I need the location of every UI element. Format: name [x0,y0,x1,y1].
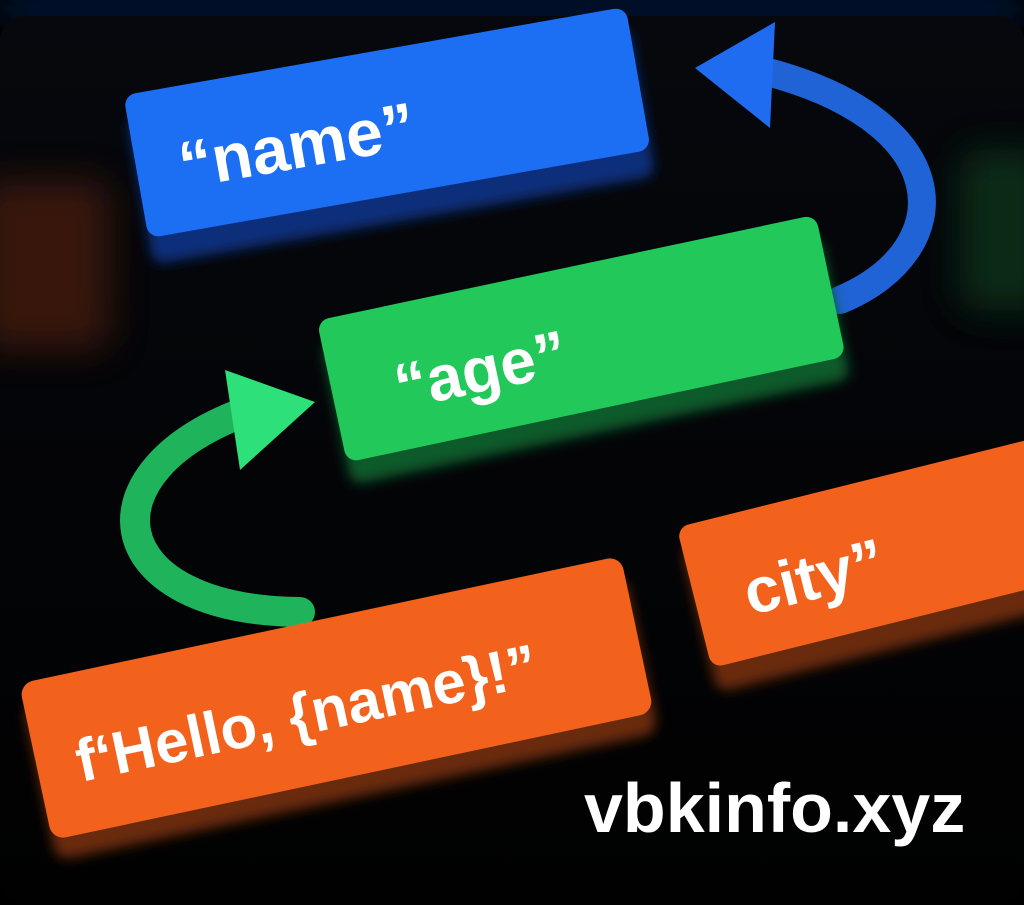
box: city: city” [736,525,892,629]
arrow: blue curved [695,22,922,300]
box: f-string: f‘Hello, {name}!” [70,631,543,795]
box: name [123,7,655,265]
watermark: vbkinfo.xyz [584,769,965,847]
blurred orange blob [0,180,110,350]
blurred green blob [960,150,1024,310]
arrow: green curved [135,370,315,612]
box: city [677,435,1024,692]
box: name: “name” [173,88,421,202]
box: age [317,215,851,485]
box: age: “age” [388,316,573,423]
box: f-string [19,556,658,861]
